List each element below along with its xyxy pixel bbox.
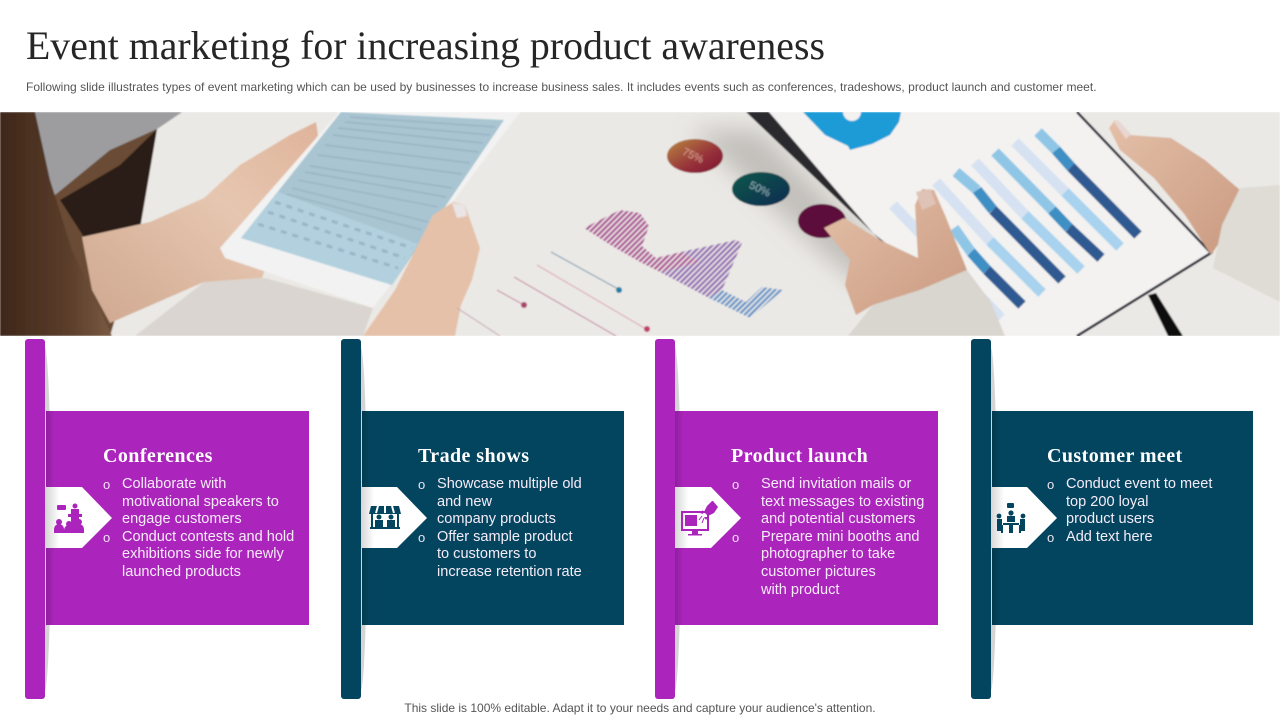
bullet text: Showcase multiple old [437,476,582,492]
arrow tag with icon: market stall [362,487,427,548]
bullet markers: o [418,530,425,545]
striped area chart [584,210,700,272]
bullet markers [103,477,110,545]
arrow tag with icon: meeting table [992,487,1057,548]
card: Product launch [655,339,938,699]
strap [1148,293,1183,336]
bullet text: top 200 loyal [1066,494,1148,510]
paper with charts shadow [690,130,880,300]
bullet text [761,476,924,598]
right tablet page [746,112,905,262]
arrow tag with icon: speaker at podium [46,487,112,548]
arm left [82,122,318,323]
thumb hand [363,202,480,336]
bullet text: launched products [122,564,241,580]
bullet text: product users [1066,511,1154,527]
bullet text: Prepare mini booths and [761,529,920,545]
bullet text: and potential customers [761,511,915,527]
footer note: This slide is 100% editable. Adapt it to your needs and capture your audience's attention. [404,701,876,715]
tablet [220,112,520,308]
right hand [1109,120,1240,255]
heading: Conferences [103,445,213,467]
bullet text: Send invitation mails or [761,476,911,492]
pole [971,339,991,699]
subtitle description: Following slide illustrates types of event marketing which can be used by businesses to increase business sales. It includes events such as conferences, tradeshows, product launch and customer meet. [26,80,1097,94]
heading: Trade shows [418,445,530,467]
bullet markers: o [1047,477,1054,492]
heading: Product launch [731,445,868,467]
bullet markers [732,477,739,545]
panel [992,411,1253,625]
pole [25,339,45,699]
bullet text: Conduct event to meet [1066,476,1212,492]
bullet text: to customers to [437,546,536,562]
bars [893,132,1138,318]
bullet text: photographer to take [761,546,895,562]
backdrop left [0,112,182,336]
bullet markers [418,477,425,545]
banner photo: hands holding tablets with charts: 50% [747,179,772,200]
pole [341,339,361,699]
bullet text: Conduct contests and hold [122,529,294,545]
panel [46,411,309,625]
bullet text: motivational speakers to [122,494,279,510]
bullet markers: o [103,477,110,492]
banner photo: hands holding tablets with charts [0,112,1280,336]
hair [0,112,112,336]
bullet text: with product [761,582,839,598]
pointing hand [824,189,967,315]
bullet markers: o [732,477,739,492]
line charts [457,252,646,336]
blue pie [803,112,901,150]
bullet markers: o [732,530,739,545]
card: Customer meet [971,339,1253,699]
bullet text: Add text here [1066,529,1153,545]
bullet text: engage customers [122,511,242,527]
banner photo: hands holding tablets with charts: 75% [680,146,705,166]
panel [362,411,624,625]
round gauges [667,139,723,173]
bullet text: exhibitions side for newly [122,546,284,562]
bullet markers: o [103,530,110,545]
bullet text: and new [437,494,492,510]
bullet text: increase retention rate [437,564,582,580]
bullet text [437,476,582,580]
arrow tag with icon: screen and rocket [675,487,741,548]
card: Trade shows [341,339,624,699]
pole [655,339,675,699]
bullet text: Collaborate with [122,476,226,492]
bullet markers: o [418,477,425,492]
bullet text: Offer sample product [437,529,573,545]
panel [675,411,938,625]
bullet markers [1047,477,1054,545]
bullet text [1066,476,1212,545]
bullet markers: o [1047,530,1054,545]
bullet text: company products [437,511,556,527]
left sleeve [848,270,1005,336]
bullet text: customer pictures [761,564,876,580]
title: Event marketing for increasing product awareness [26,24,825,68]
tablet shadow [135,278,373,336]
bullet text: text messages to existing [761,494,924,510]
bullet text [122,476,294,580]
card: Conferences [25,339,309,699]
heading: Customer meet [1047,445,1183,467]
right sleeve [1213,185,1280,302]
